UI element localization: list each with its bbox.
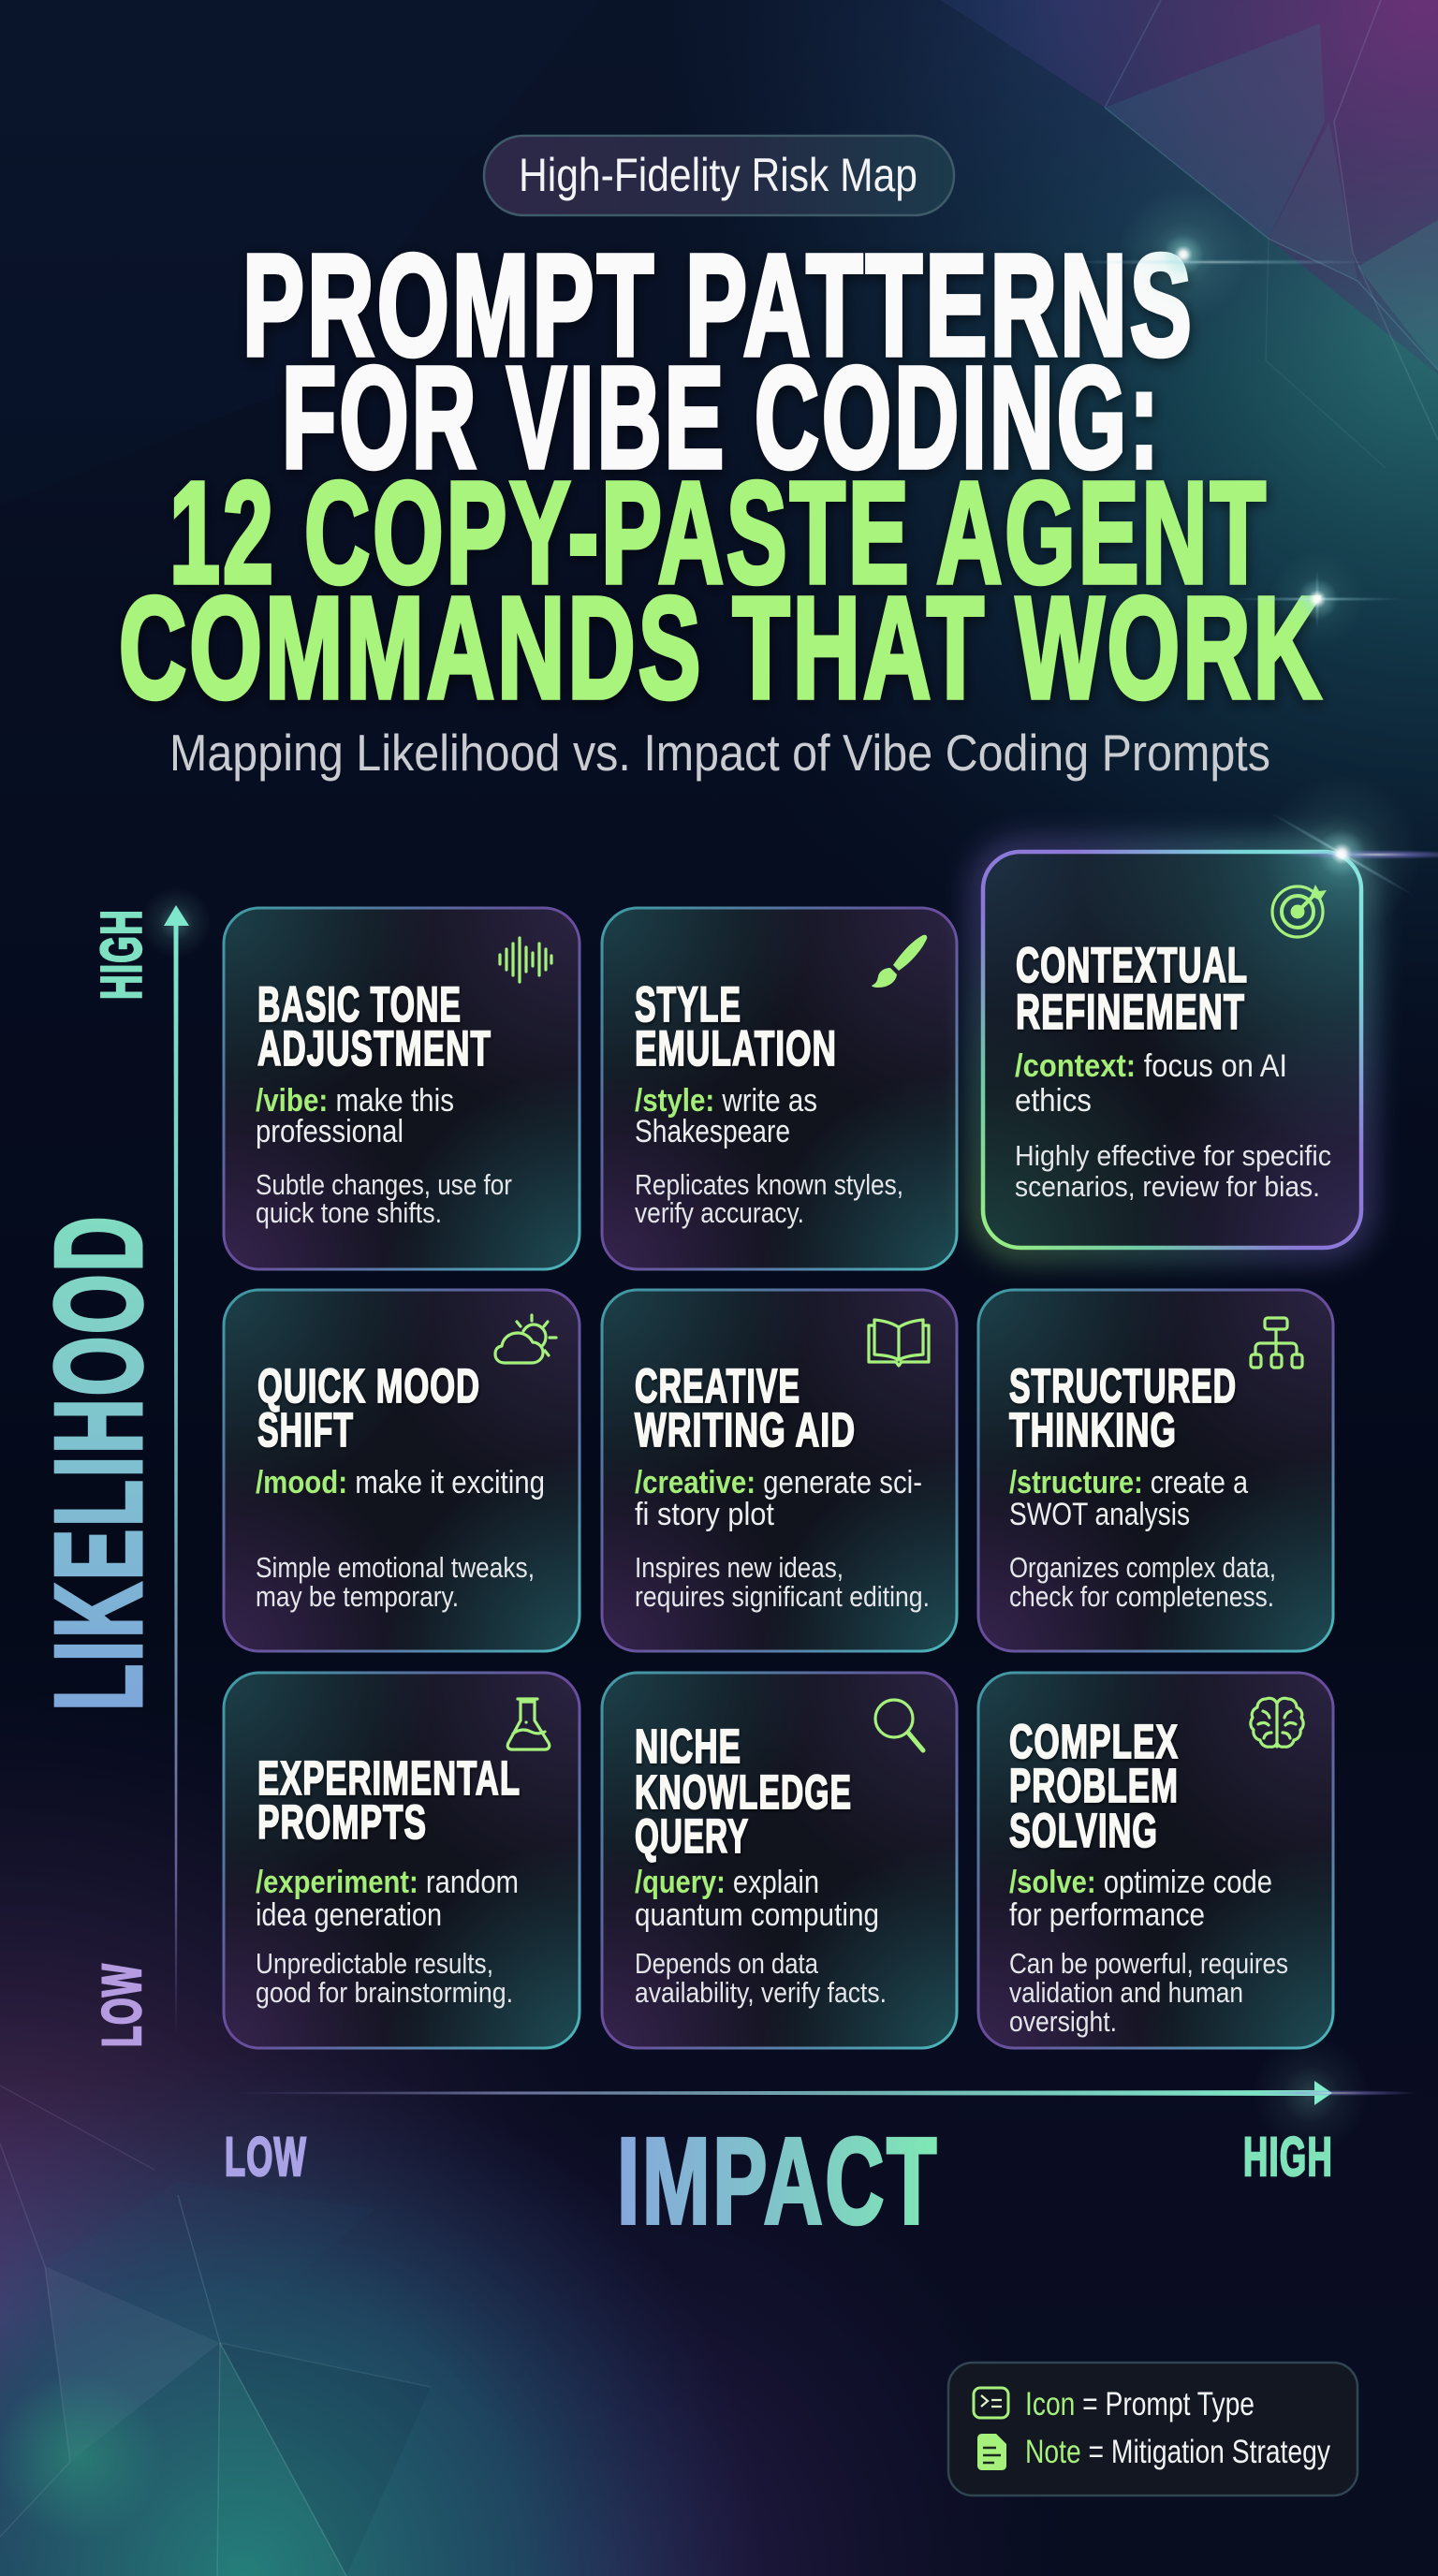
- command: quantum computing: [635, 1897, 879, 1933]
- command: [635, 1865, 879, 1933]
- command: [1009, 1865, 1272, 1933]
- legend text: note: Note = Mitigation Strategy: [1025, 2434, 1330, 2470]
- heading: KNOWLEDGE: [635, 1765, 852, 1819]
- heading: SOLVING: [1009, 1804, 1158, 1857]
- note: validation and human: [1009, 1976, 1243, 2009]
- command: fi story plot: [635, 1497, 775, 1532]
- icon: org chart: [1251, 1318, 1302, 1368]
- note: [1009, 1947, 1288, 2038]
- note: quick tone shifts.: [256, 1196, 442, 1229]
- heading: SHIFT: [257, 1403, 354, 1456]
- heading: WRITING AID: [635, 1403, 856, 1456]
- heading: REFINEMENT: [1016, 985, 1245, 1040]
- command: /vibe: make this: [256, 1083, 454, 1119]
- heading: ADJUSTMENT: [257, 1021, 492, 1076]
- label: LIKELIHOOD: LIKELIHOOD: [30, 1214, 167, 1711]
- heading: QUICK MOOD: [257, 1359, 480, 1412]
- note: availability, verify facts.: [635, 1976, 887, 2009]
- note: Inspires new ideas,: [635, 1551, 844, 1584]
- note: may be temporary.: [256, 1580, 459, 1613]
- icon: target: [1272, 885, 1327, 937]
- sparkle: title right: [1233, 550, 1401, 648]
- command: SWOT analysis: [1009, 1497, 1190, 1532]
- command: /solve: optimize code: [1009, 1865, 1272, 1900]
- card: Creative Writing Aid: [602, 1290, 957, 1651]
- icon: note document: [977, 2434, 1006, 2470]
- command: /style: write as: [635, 1083, 817, 1119]
- command: professional: [256, 1114, 404, 1149]
- impact axis: [225, 2037, 1418, 2249]
- icon: magnifier: [875, 1700, 923, 1750]
- command: [635, 1083, 817, 1149]
- heading: [1009, 1715, 1179, 1857]
- arrow: likelihood up: [164, 905, 189, 2036]
- icon: flask: [507, 1699, 550, 1749]
- command: ethics: [1015, 1083, 1092, 1119]
- card: Basic Tone Adjustment: [224, 908, 580, 1269]
- card: Style Emulation: [602, 908, 957, 1269]
- note: Unpredictable results,: [256, 1947, 493, 1980]
- heading: THINKING: [1009, 1403, 1177, 1456]
- note: check for completeness.: [1009, 1580, 1274, 1613]
- badge: High-Fidelity Risk Map: [484, 136, 954, 215]
- heading: EXPERIMENTAL: [257, 1751, 521, 1805]
- heading: CONTEXTUAL: [1016, 938, 1248, 993]
- note: [635, 1168, 903, 1229]
- icon: open book: [869, 1320, 929, 1366]
- badge: High-Fidelity Risk Map: High-Fidelity Risk Map: [519, 149, 917, 201]
- heading: STYLE: [635, 977, 741, 1032]
- card: Structured Thinking: [978, 1290, 1333, 1651]
- note: Highly effective for specific: [1015, 1139, 1331, 1172]
- icon: cloud and sun: [495, 1315, 556, 1363]
- command: [1015, 1048, 1287, 1119]
- label: IMPACT: IMPACT: [617, 2112, 939, 2249]
- heading: STRUCTURED: [1009, 1359, 1237, 1412]
- heading: [257, 977, 492, 1076]
- label: HIGH: HIGH: [90, 909, 154, 1000]
- note: [1015, 1139, 1331, 1203]
- heading: NICHE: [635, 1720, 741, 1773]
- heading: [635, 1720, 852, 1863]
- note: [1009, 1551, 1276, 1613]
- command: for performance: [1009, 1897, 1205, 1933]
- note: [256, 1947, 513, 2009]
- note: Replicates known styles,: [635, 1168, 903, 1201]
- heading: [257, 1751, 521, 1849]
- command: Shakespeare: [635, 1114, 790, 1149]
- heading: [1009, 1359, 1237, 1456]
- sparkle: title top right: [1058, 189, 1376, 320]
- command: /structure: create a: [1009, 1465, 1248, 1500]
- note: [635, 1947, 887, 2009]
- subtitle: Mapping Likelihood vs. Impact of Vibe Coding Prompts: [169, 724, 1270, 782]
- command: idea generation: [256, 1897, 442, 1933]
- heading: BASIC TONE: [257, 977, 462, 1032]
- heading: COMPLEX: [1009, 1715, 1179, 1768]
- command: [256, 1865, 519, 1933]
- heading: PROBLEM: [1009, 1759, 1179, 1812]
- command: /context: focus on AI: [1015, 1048, 1287, 1084]
- label: LOW: LOW: [92, 1963, 153, 2047]
- icon: brain: [1251, 1698, 1303, 1747]
- note: [256, 1551, 535, 1613]
- icon: waveform: [500, 938, 551, 982]
- command: /creative: generate sci-: [635, 1465, 922, 1500]
- label: LOW: LOW: [225, 2127, 307, 2188]
- note: scenarios, review for bias.: [1015, 1170, 1320, 1203]
- sparkle: highlighted card corner: [1262, 774, 1438, 933]
- command: [256, 1083, 454, 1149]
- note: [256, 1168, 512, 1229]
- note: verify accuracy.: [635, 1196, 804, 1229]
- note: requires significant editing.: [635, 1580, 930, 1613]
- heading: CREATIVE: [635, 1359, 800, 1412]
- legend: [948, 2363, 1357, 2496]
- command: /experiment: random: [256, 1865, 519, 1900]
- command: [635, 1465, 922, 1532]
- heading: QUERY: [635, 1809, 749, 1863]
- heading: [1016, 938, 1248, 1040]
- heading: [635, 1359, 856, 1456]
- note: Organizes complex data,: [1009, 1551, 1276, 1584]
- note: good for brainstorming.: [256, 1976, 513, 2009]
- title: [119, 225, 1324, 728]
- note: oversight.: [1009, 2005, 1117, 2038]
- heading: [257, 1359, 480, 1456]
- card: Quick Mood Shift: [224, 1290, 580, 1651]
- command: /query: explain: [635, 1865, 819, 1900]
- card: Contextual Refinement (highlighted): [983, 852, 1361, 1248]
- card: Experimental Prompts: [224, 1673, 580, 2048]
- icon: prompt terminal: [974, 2388, 1008, 2418]
- label: HIGH: HIGH: [1243, 2127, 1333, 2188]
- heading: PROMPTS: [257, 1795, 427, 1849]
- likelihood axis: [30, 886, 212, 2047]
- arrow: impact right: [234, 2081, 1418, 2105]
- note: Depends on data: [635, 1947, 819, 1980]
- note: Subtle changes, use for: [256, 1168, 512, 1201]
- heading: EMULATION: [635, 1021, 837, 1076]
- command: /mood: make it exciting: [256, 1465, 545, 1500]
- note: [635, 1551, 930, 1613]
- command: [1009, 1465, 1248, 1532]
- card: Complex Problem Solving: [978, 1673, 1333, 2048]
- icon: paint brush: [872, 935, 927, 988]
- card: Niche Knowledge Query: [602, 1673, 957, 2048]
- legend text: icon: Icon = Prompt Type: [1025, 2386, 1255, 2422]
- heading: [635, 977, 837, 1076]
- note: Can be powerful, requires: [1009, 1947, 1288, 1980]
- note: Simple emotional tweaks,: [256, 1551, 535, 1584]
